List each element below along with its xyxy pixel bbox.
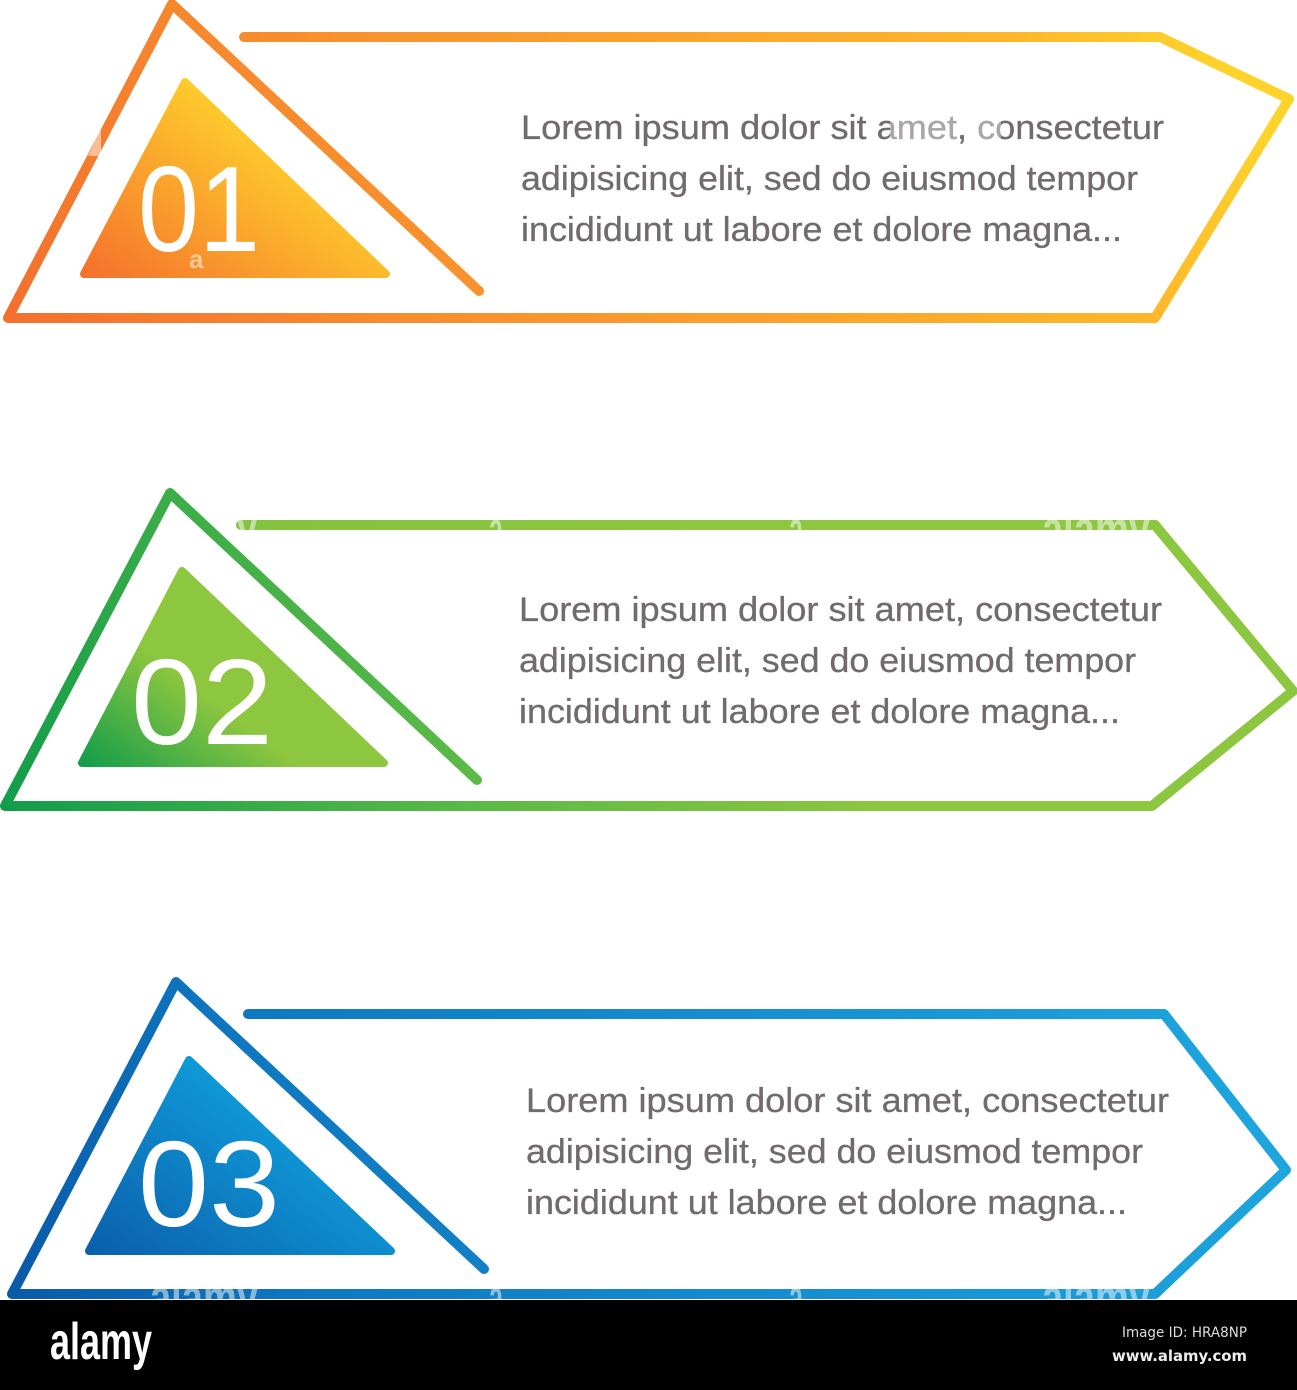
website: www.alamy.com (1112, 1347, 1247, 1365)
number 02: 02 (131, 634, 273, 770)
text block 02: incididunt ut labore et dolore magna... (519, 693, 1120, 731)
top edge 02 (241, 520, 1155, 530)
text block 01 (521, 109, 1164, 249)
footer logo: alamy (50, 1313, 152, 1371)
inner triangle 03 (89, 1060, 391, 1251)
text block 01: incididunt ut labore et dolore magna... (521, 211, 1122, 249)
footer bar (0, 1300, 1297, 1390)
arrow outline 01 (8, 4, 1289, 318)
text block 02 (519, 591, 1162, 731)
text block 01: Lorem ipsum dolor sit amet, consectetur (521, 109, 1164, 147)
text block 03: Lorem ipsum dolor sit amet, consectetur (526, 1082, 1169, 1120)
panel: step 03: alamy (1042, 1269, 1150, 1327)
panel: step 01: a (189, 244, 204, 274)
text block 02: adipisicing elit, sed do eiusmod tempor (519, 642, 1136, 680)
text block 03 (526, 1082, 1169, 1222)
panel: step 02: alamy (1042, 501, 1150, 559)
inner triangle 01 (84, 82, 386, 274)
panel: step 02: y (237, 501, 257, 559)
panel: step 03: alamy (150, 1269, 258, 1327)
arrow outline 02 (5, 493, 1293, 806)
panel: step 03 (12, 982, 1286, 1327)
number 01: 01 (138, 141, 260, 277)
text block 03: incididunt ut labore et dolore magna... (526, 1184, 1127, 1222)
text block 03: adipisicing elit, sed do eiusmod tempor (526, 1133, 1143, 1171)
number 03: 03 (138, 1116, 280, 1252)
text block 02: Lorem ipsum dolor sit amet, consectetur (519, 591, 1162, 629)
panel: step 02 (5, 493, 1293, 806)
image id: Image ID: HRA8NP (1122, 1325, 1247, 1341)
panel: step 02: a (489, 501, 504, 559)
panel: step 02: a (789, 501, 804, 559)
panel: step 03: a (789, 1269, 804, 1327)
panel: step 01 (8, 4, 1289, 318)
text block 01: adipisicing elit, sed do eiusmod tempor (521, 160, 1138, 198)
panel: step 03: a (489, 1269, 504, 1327)
arrow outline 03 (12, 982, 1286, 1294)
inner triangle 02 (82, 571, 384, 763)
